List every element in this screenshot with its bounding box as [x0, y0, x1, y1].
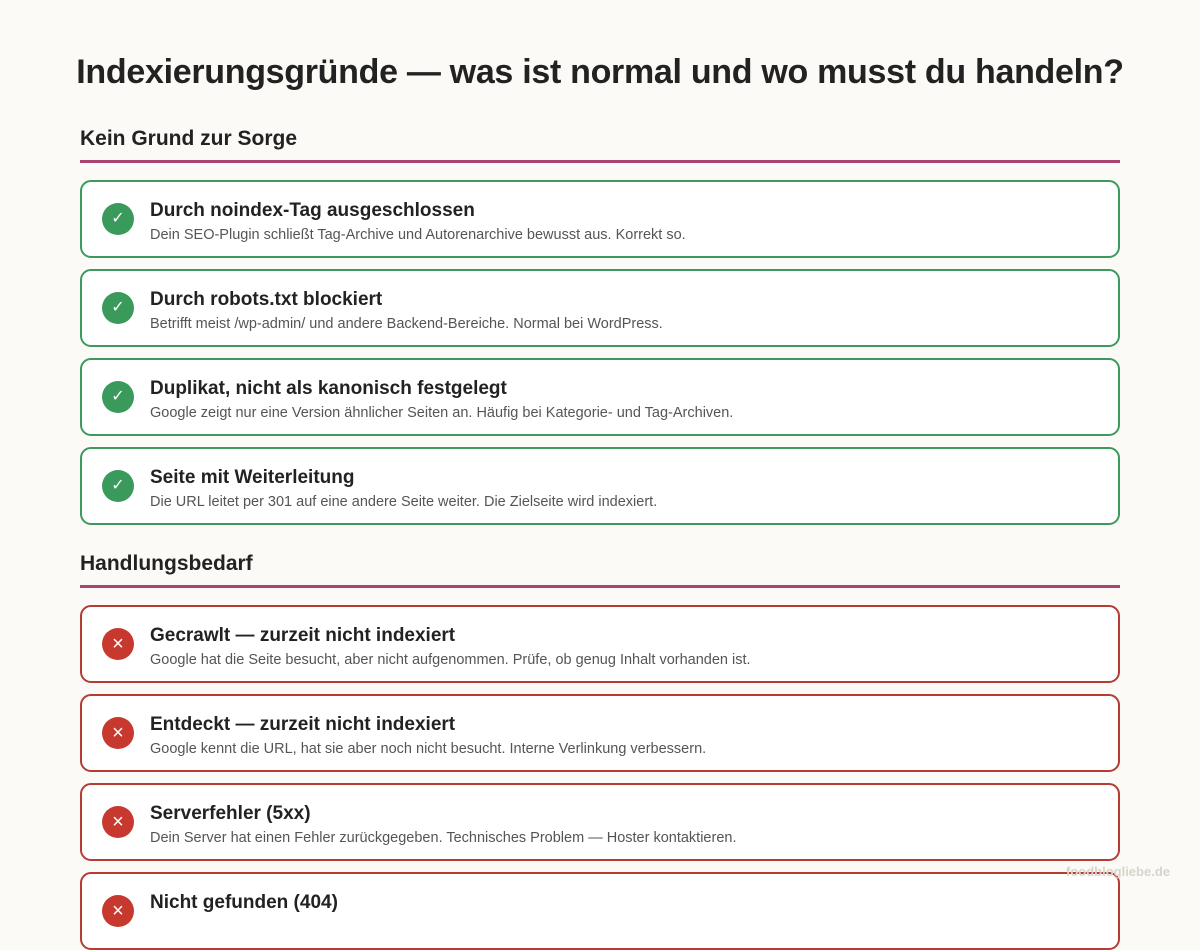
card: Duplikat: Duplikat, nicht als kanonisch festgelegt — [150, 378, 507, 399]
card: Duplikat: ✓ — [111, 388, 125, 405]
card: robots.txt: ✓ — [111, 299, 125, 316]
watermark: foodblogliebe.de — [1066, 864, 1170, 879]
card: Entdeckt — [80, 694, 1120, 772]
card: noindex: Durch noindex-Tag ausgeschlossen — [150, 200, 475, 221]
card: 404 — [80, 872, 1120, 950]
heading: Handlungsbedarf — [80, 552, 1120, 588]
card: Duplikat: Google zeigt nur eine Version ähnlicher Seiten an. Häufig bei Kategorie- und Tag-Archiven. — [150, 405, 733, 421]
card: robots.txt: Durch robots.txt blockiert — [150, 289, 382, 310]
card: Gecrawlt — [80, 605, 1120, 683]
card: noindex: ✓ — [111, 210, 125, 227]
card: Entdeckt: Google kennt die URL, hat sie aber noch nicht besucht. Interne Verlinkung verbessern. — [150, 741, 706, 757]
card: Weiterleitung — [80, 447, 1120, 525]
card: Serverfehler: × — [112, 811, 124, 833]
card: Serverfehler: Serverfehler (5xx) — [150, 803, 311, 824]
card: robots.txt — [80, 269, 1120, 347]
card: Serverfehler — [80, 783, 1120, 861]
card: Gecrawlt: Google hat die Seite besucht, aber nicht aufgenommen. Prüfe, ob genug Inhalt vorhanden ist. — [150, 652, 751, 668]
card: Gecrawlt: × — [112, 633, 124, 655]
card: Serverfehler: Dein Server hat einen Fehler zurückgegeben. Technisches Problem — Hoster kontaktieren. — [150, 830, 736, 846]
card: Gecrawlt: Gecrawlt — zurzeit nicht indexiert — [150, 625, 455, 646]
card: noindex — [80, 180, 1120, 258]
card: Duplikat — [80, 358, 1120, 436]
heading: Handlungsbedarf: Handlungsbedarf — [80, 552, 253, 575]
card: 404: Nicht gefunden (404) — [150, 892, 338, 913]
card: 404: × — [112, 900, 124, 922]
card: Weiterleitung: Seite mit Weiterleitung — [150, 467, 354, 488]
heading: Kein Grund zur Sorge — [80, 127, 1120, 163]
heading: Kein Grund zur Sorge: Kein Grund zur Sorge — [80, 127, 297, 150]
card: Weiterleitung: ✓ — [111, 477, 125, 494]
card: Entdeckt: Entdeckt — zurzeit nicht indexiert — [150, 714, 455, 735]
card: Entdeckt: × — [112, 722, 124, 744]
card: Weiterleitung: Die URL leitet per 301 auf eine andere Seite weiter. Die Zielseite wird indexiert. — [150, 494, 657, 510]
card: noindex: Dein SEO-Plugin schließt Tag-Archive und Autorenarchive bewusst aus. Korrekt so. — [150, 227, 686, 243]
card: robots.txt: Betrifft meist /wp-admin/ und andere Backend-Bereiche. Normal bei WordPress. — [150, 316, 663, 332]
title: Indexierungsgründe — was ist normal und wo musst du handeln? — [76, 53, 1124, 91]
